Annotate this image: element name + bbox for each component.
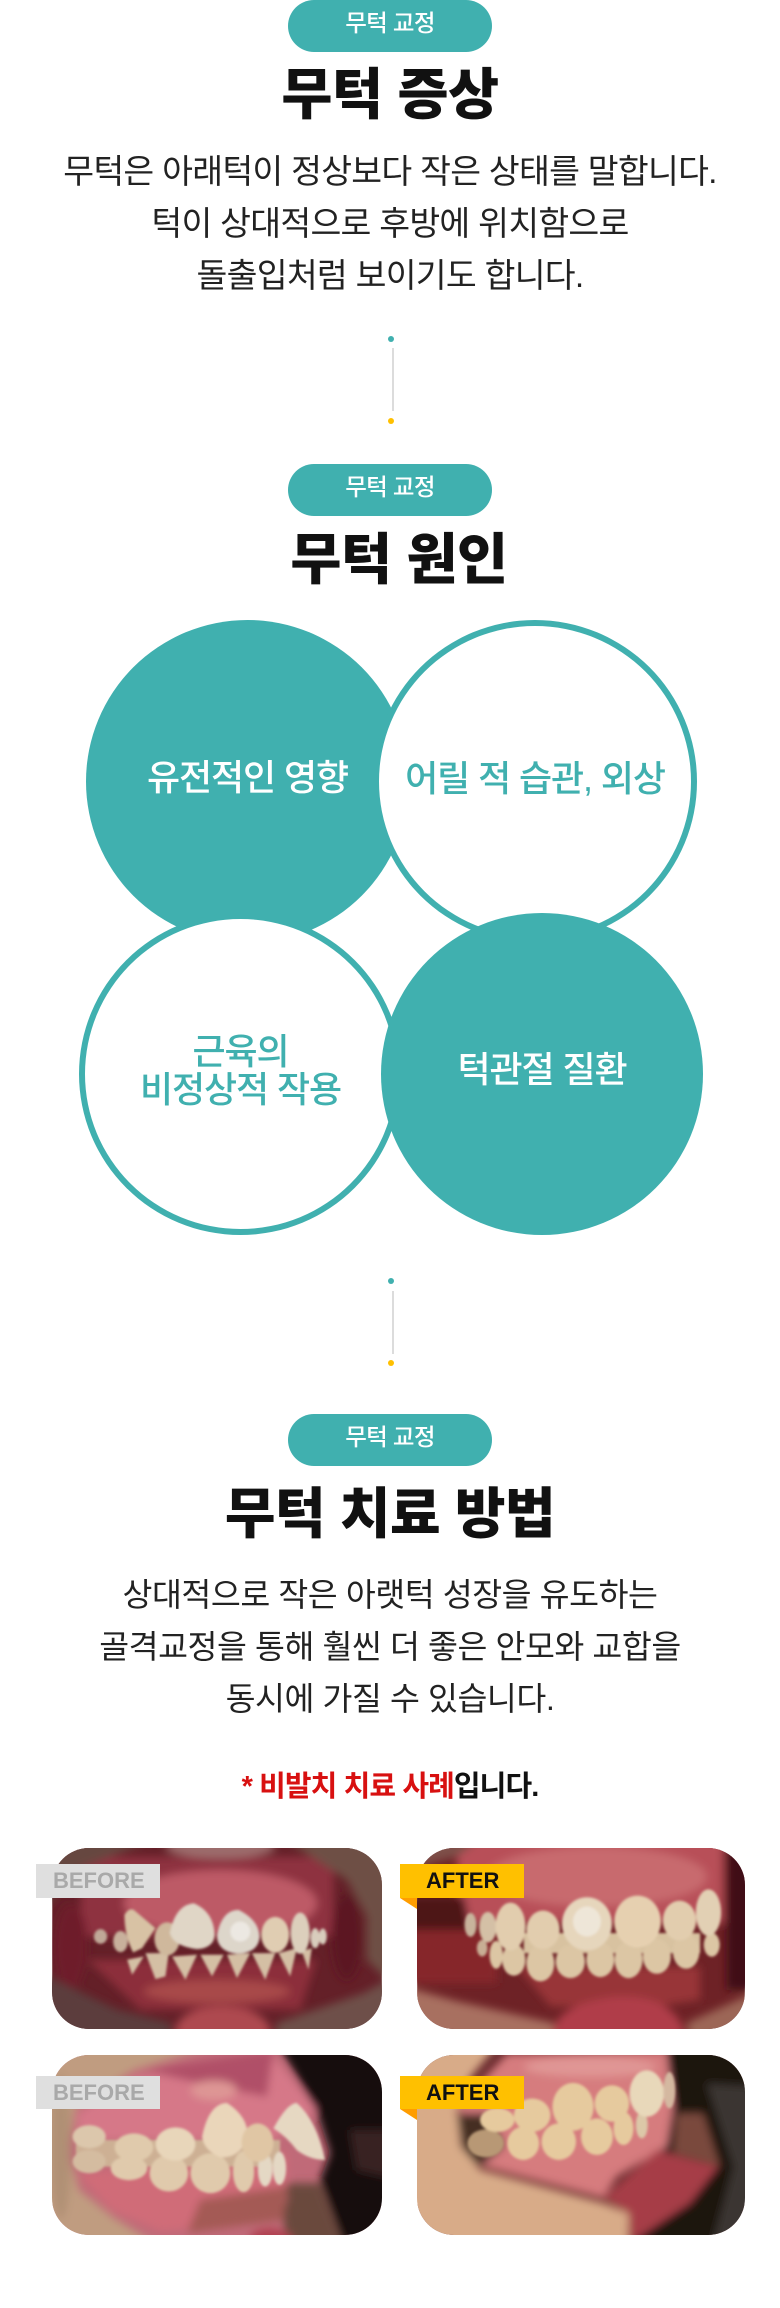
divider 1 [388, 336, 394, 424]
pill: section 2 [288, 464, 492, 516]
pill: section 3: 무턱 교정 [345, 1424, 435, 1450]
photo: after front [417, 1848, 745, 2029]
text: treatment description: 동시에 가질 수 있습니다. [226, 1681, 554, 1717]
circle: childhood habits [373, 620, 697, 943]
label: before 1 [36, 1864, 160, 1898]
text: symptoms description: 돌출입처럼 보이기도 합니다. [197, 258, 583, 295]
photo: before front [52, 1848, 382, 2029]
text: symptoms description: 턱이 상대적으로 후방에 위치함으로 [151, 206, 629, 243]
text: symptoms description: 무턱은 아래턱이 정상보다 작은 상태를 말합니다. [63, 154, 717, 191]
pill: section 1 [288, 0, 492, 52]
text: treatment description [99, 1577, 681, 1717]
circle: abnormal muscle action [79, 913, 402, 1235]
circle: childhood habits: 어릴 적 습관, 외상 [405, 758, 665, 798]
label: before 2: BEFORE [53, 2080, 145, 2105]
text: treatment description: 골격교정을 통해 훨씬 더 좋은 안모와 교합을 [99, 1629, 681, 1665]
circle: genetic: 유전적인 영향 [147, 756, 348, 798]
note: non-extraction case: * 비발치 치료 사례입니다. [242, 1771, 538, 1803]
text: treatment description: 상대적으로 작은 아랫턱 성장을 유도하는 [123, 1577, 657, 1613]
label: after 2: AFTER [426, 2080, 499, 2105]
circle: TMJ disease [381, 913, 703, 1235]
label: before 2 [36, 2076, 160, 2109]
label: after 1 [400, 1864, 524, 1898]
circle: TMJ disease: 턱관절 질환 [457, 1049, 626, 1090]
circle diagram: causes [79, 620, 703, 1235]
heading: causes: 무턱 원인 [290, 529, 508, 591]
label: after 1: AFTER [426, 1868, 499, 1893]
pill: section 3 [288, 1414, 492, 1466]
label: after 2 [400, 2076, 524, 2109]
pill: section 2: 무턱 교정 [345, 474, 435, 500]
heading: symptoms: 무턱 증상 [281, 64, 499, 126]
fold: after 2 [400, 2109, 417, 2120]
fold: after 1 [400, 1898, 417, 1909]
circle: abnormal muscle action: 비정상적 작용 [140, 1068, 341, 1110]
photo: before side [52, 2055, 382, 2235]
pill: section 1: 무턱 교정 [345, 10, 435, 36]
heading: treatment: 무턱 치료 방법 [225, 1483, 555, 1545]
text: symptoms description [63, 154, 717, 295]
circle: abnormal muscle action: 근육의 [192, 1030, 289, 1072]
label: before 1: BEFORE [53, 1868, 145, 1893]
divider 2 [388, 1278, 394, 1366]
circle: genetic [86, 620, 409, 943]
photo: after side [417, 2055, 745, 2235]
